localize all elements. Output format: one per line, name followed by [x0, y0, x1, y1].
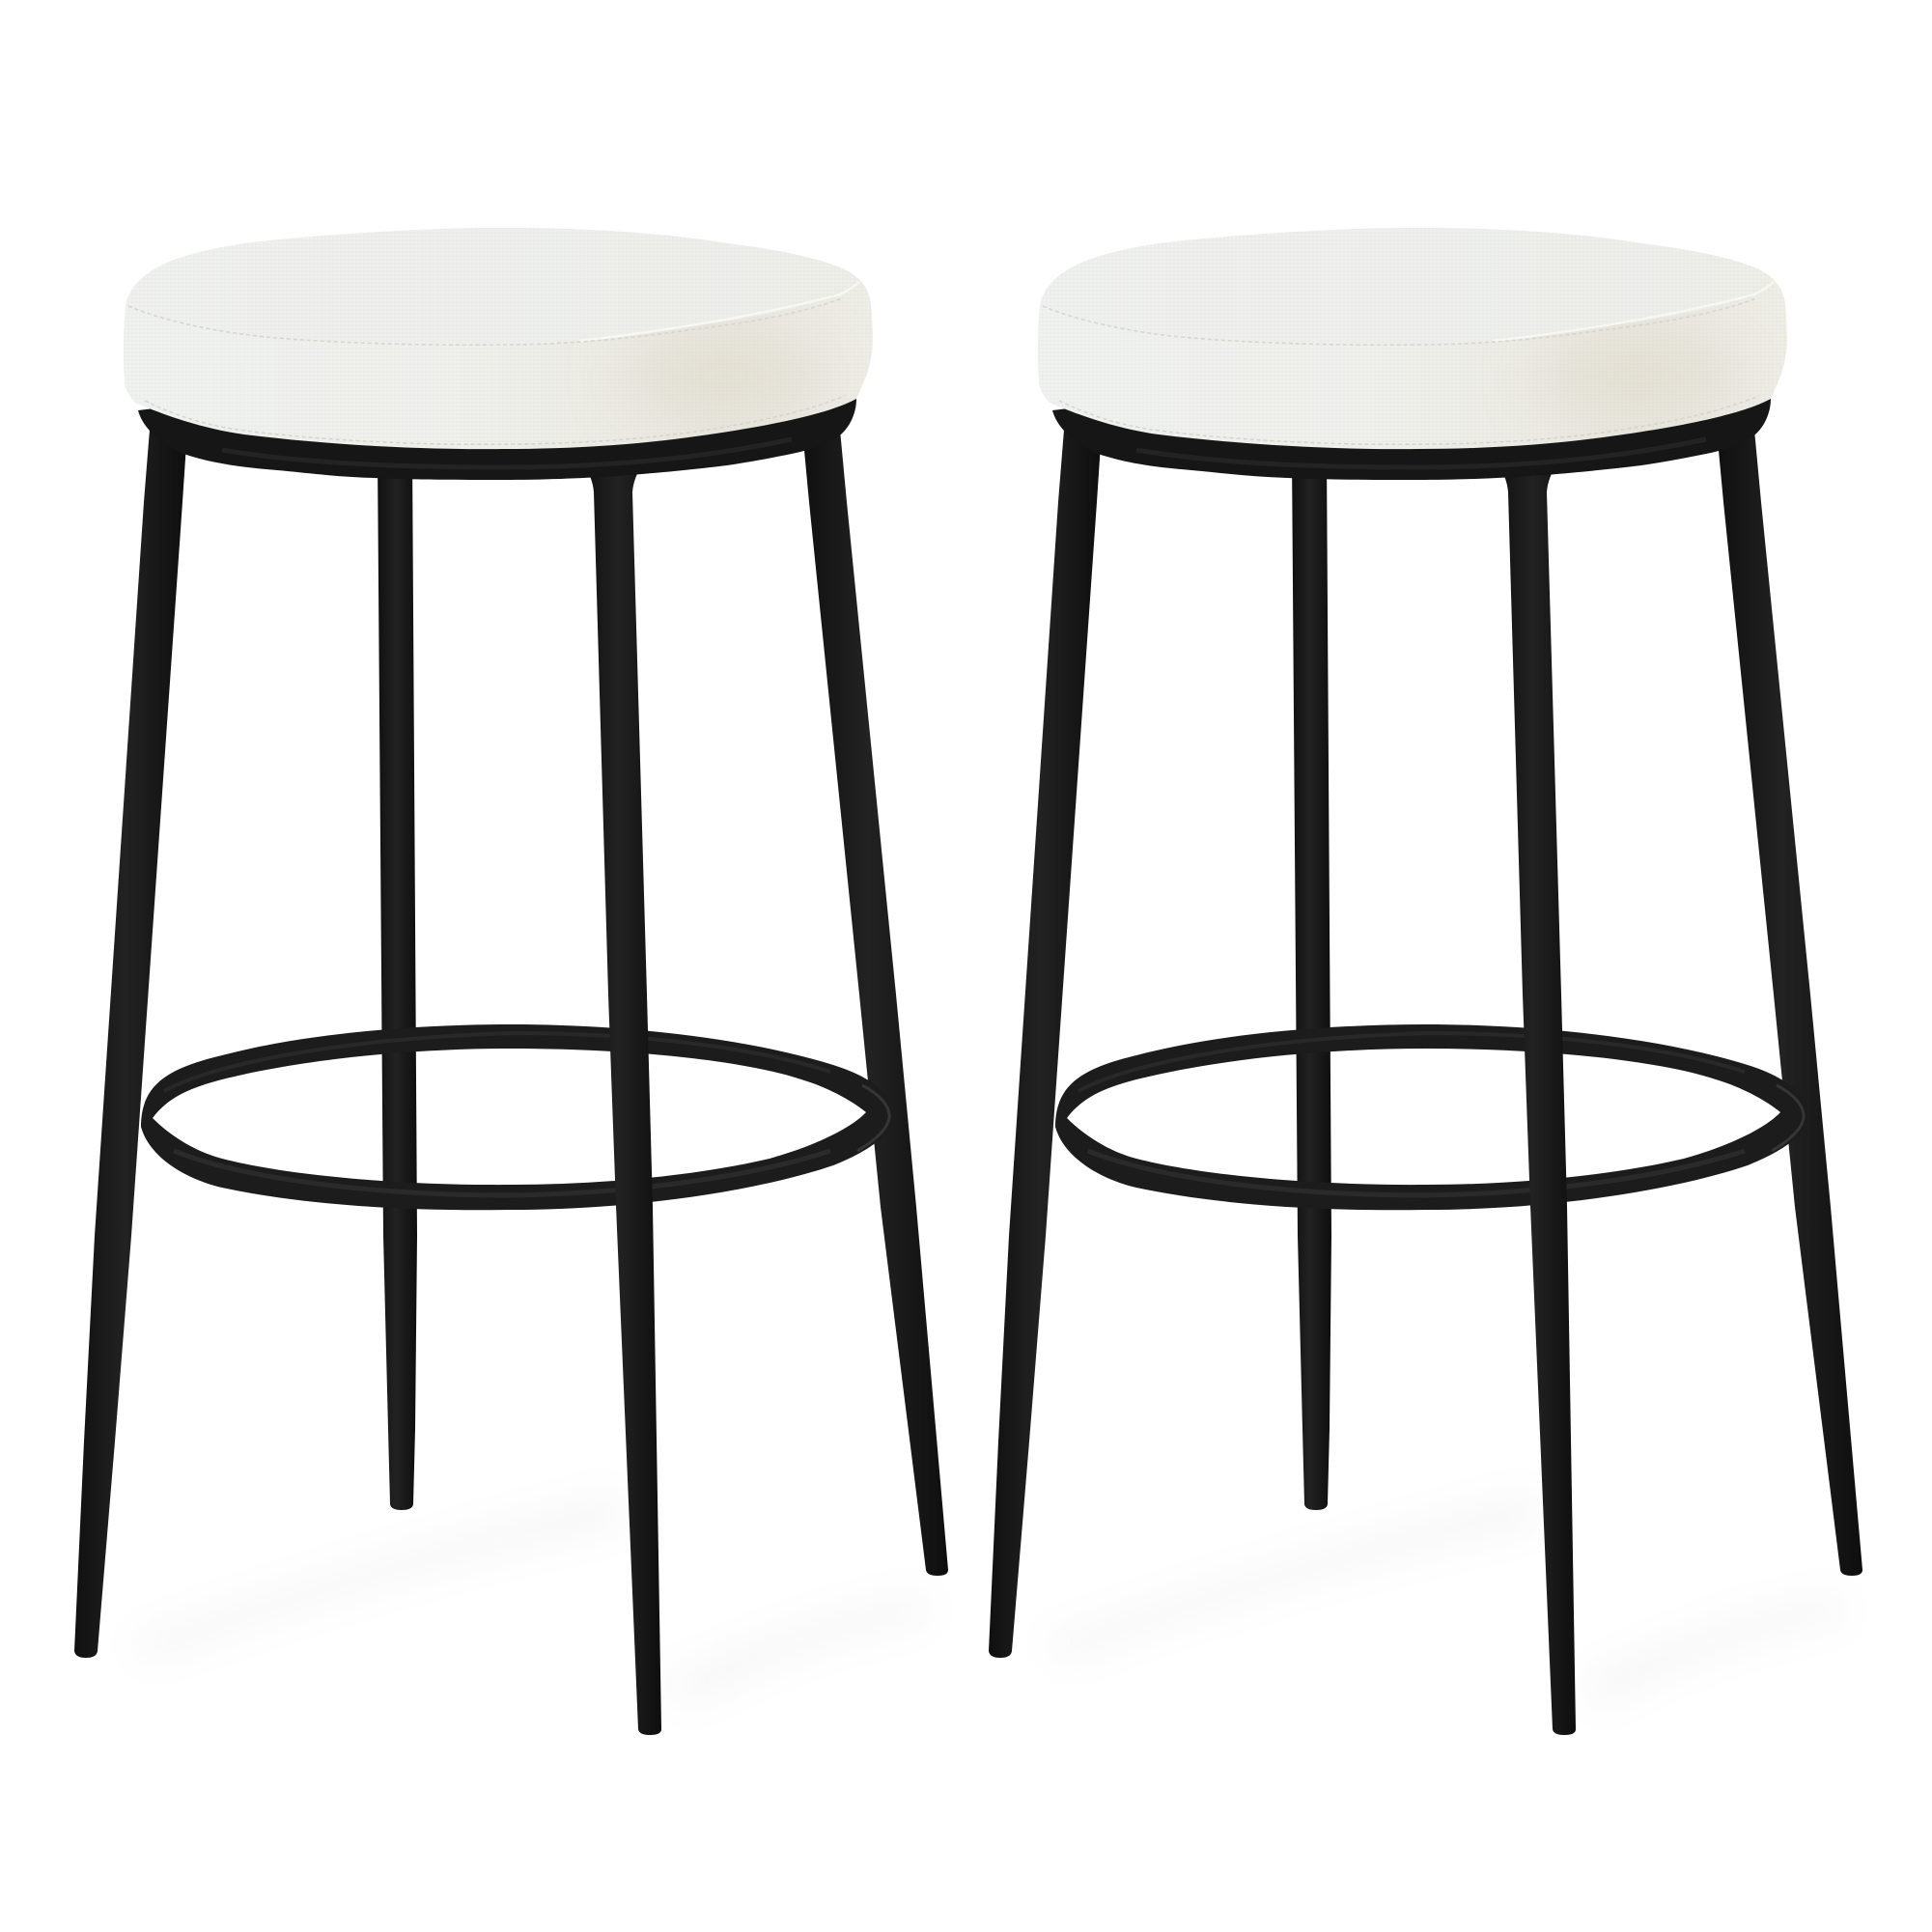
cushion side	[124, 228, 873, 449]
floor shadows	[126, 1492, 1841, 1709]
fabric weave	[1039, 228, 1583, 449]
seam stitching	[1043, 298, 1756, 345]
product image: two bar stools	[74, 228, 1862, 1735]
right leg	[802, 430, 948, 1576]
back leg	[378, 454, 417, 1510]
bottom stitching	[1059, 396, 1759, 444]
left front leg	[989, 430, 1102, 1658]
footrest ring	[1055, 1024, 1807, 1210]
warm fabric patch	[623, 336, 826, 417]
left front leg	[74, 430, 187, 1658]
cushion top	[1040, 228, 1774, 345]
centre front leg	[1498, 463, 1576, 1735]
right leg	[1717, 430, 1862, 1576]
seat cushion	[1038, 226, 1789, 451]
back leg	[1292, 454, 1331, 1510]
fabric weave	[124, 228, 669, 449]
seam stitching	[128, 298, 842, 345]
warm fabric patch	[1537, 336, 1740, 417]
footrest ring	[141, 1024, 893, 1210]
seat ring	[1052, 367, 1771, 480]
cushion top	[126, 228, 859, 345]
seat ring	[138, 367, 856, 480]
seat cushion	[124, 226, 875, 451]
left stool	[74, 226, 948, 1735]
bottom stitching	[145, 396, 845, 444]
right stool	[989, 226, 1862, 1735]
piping highlight	[1494, 282, 1774, 341]
centre front leg	[583, 463, 661, 1735]
piping highlight	[579, 282, 859, 341]
cushion side	[1038, 228, 1787, 449]
